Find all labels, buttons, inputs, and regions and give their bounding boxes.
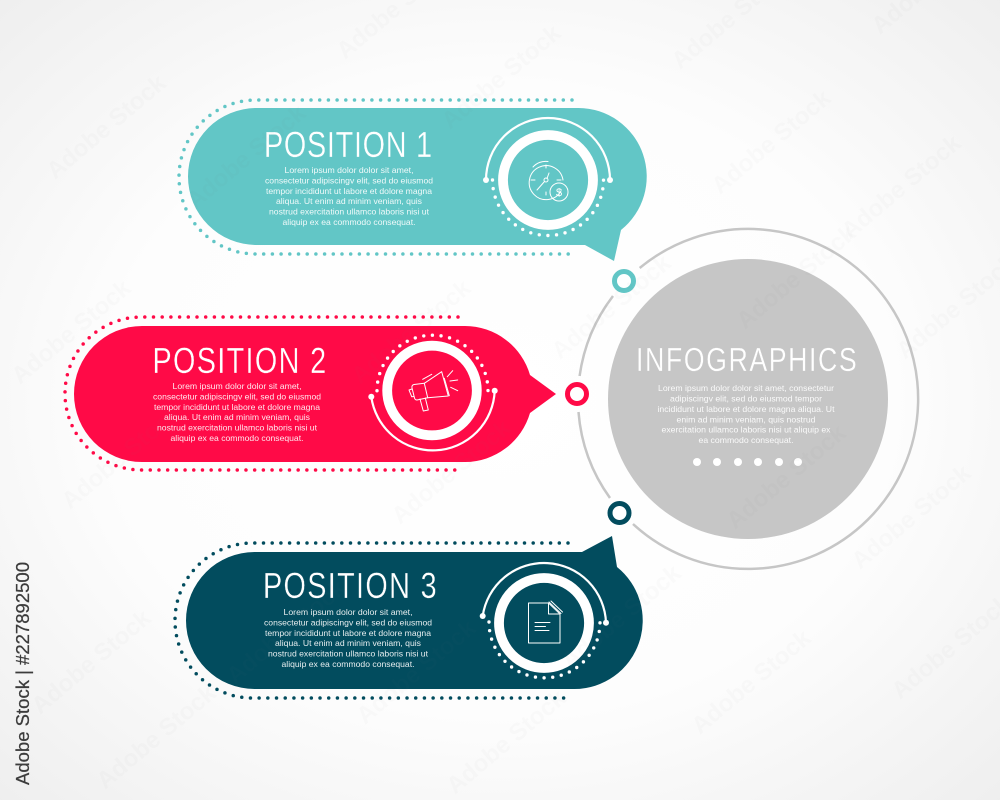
icon: clock with dollar: $ [556, 187, 562, 199]
badge ring 2 [368, 335, 498, 450]
text block: position 2 body: aliqua. Ut enim ad minim veniam, quis [164, 412, 310, 422]
text block: position 2 body: nostrud exercitation ullamco laboris nisi ut [157, 423, 318, 433]
badge ring 3 [480, 563, 609, 678]
six white dots [693, 458, 802, 466]
panel: position 2 [65, 317, 556, 470]
text block: position 1 body: aliqua. Ut enim ad minim veniam, quis [276, 196, 422, 206]
watermarks: Adobe Stock [92, 679, 222, 795]
center ring with gaps [578, 229, 918, 569]
watermarks: Adobe Stock [442, 684, 572, 800]
watermarks: Adobe Stock [352, 614, 482, 730]
icon: clock with dollar [529, 161, 568, 201]
text block: center body: exercitation ullamco laboris nisi ut aliquip ex [662, 425, 831, 435]
teal speech bubble [188, 108, 647, 261]
red speech bubble [74, 326, 556, 462]
watermarks: Adobe Stock [57, 399, 187, 515]
heading: position 2: POSITION 2 [152, 340, 326, 381]
text block: position 3 body: consectetur adipiscingv elit, sed do eiusmod [264, 617, 432, 627]
watermarks: Adobe Stock [547, 249, 677, 365]
text block: position 1 body: tempor incididunt ut labore et dolore magna [266, 186, 432, 196]
icon: megaphone [409, 371, 458, 411]
node: red connector [568, 384, 586, 404]
dotted outline 1 [179, 100, 573, 254]
text block: position 2 body: tempor incididunt ut labore et dolore magna [154, 402, 320, 412]
watermarks: Adobe Stock [42, 69, 172, 185]
watermarks: Adobe Stock [347, 274, 477, 390]
text block: center body [658, 383, 835, 445]
text block: position 1 body: aliquip ex ea commodo consequat. [282, 217, 416, 227]
watermarks: Adobe Stock [687, 624, 817, 740]
heading: position 1: POSITION 1 [264, 124, 432, 165]
heading: position 3: POSITION 3 [263, 565, 437, 606]
watermarks: Adobe Stock [7, 274, 137, 390]
watermarks: Adobe Stock [707, 84, 837, 200]
text block: position 1 body [265, 165, 433, 227]
node: dark connector [610, 504, 629, 522]
heading: infographics: INFOGRAPHICS [636, 342, 857, 379]
text block: center body: incididunt ut labore et dolore magna aliqua. Ut [658, 404, 835, 414]
text block: position 2 body: consectetur adipiscingv elit, sed do eiusmod [153, 391, 321, 401]
text block: position 3 body: tempor incididunt ut labore et dolore magna [265, 628, 431, 638]
dark speech bubble [186, 536, 643, 689]
watermarks: Adobe Stock [182, 99, 312, 215]
text block: position 1 body: Lorem ipsum dolor dolor sit amet, [284, 165, 414, 175]
badge ring 1 [483, 118, 613, 236]
watermarks: Adobe Stock [27, 604, 157, 720]
dotted outline 3 [175, 543, 571, 698]
text block: center body: ea commodo consequat. [698, 435, 794, 445]
watermarks: Adobe Stock [557, 559, 687, 675]
panel: infographics circle [608, 259, 888, 539]
watermarks: Adobe Stock [837, 129, 967, 245]
watermarks: Adobe Stock [722, 419, 852, 535]
dotted outline 2 [65, 317, 460, 470]
text block: position 2 body: Lorem ipsum dolor dolor sit amet, [172, 381, 302, 391]
node: teal connector [614, 272, 634, 290]
icon: document [528, 601, 562, 643]
text block: center body: adipiscingv elit, sed do eiusmod tempor [670, 394, 822, 404]
watermarks: Adobe Stock [437, 19, 567, 135]
watermarks: Adobe Stock [387, 414, 517, 530]
stock id vertical label: Adobe Stock | #227892500 [13, 562, 33, 785]
panel: position 1 [179, 100, 647, 261]
text block: position 3 body [264, 607, 432, 669]
text block: position 2 body: aliquip ex ea commodo consequat. [170, 433, 304, 443]
watermarks: Adobe Stock [732, 219, 862, 335]
text block: position 2 body [153, 381, 321, 443]
text block: center body: enim ad minim veniam, quis nostrud [676, 414, 816, 424]
text block: center body: Lorem ipsum dolor dolor sit amet, consectetur [658, 383, 834, 393]
text block: position 3 body: nostrud exercitation ullamco laboris nisi ut [268, 649, 429, 659]
text block: position 3 body: aliqua. Ut enim ad minim veniam, quis [275, 638, 421, 648]
text block: position 3 body: Lorem ipsum dolor dolor sit amet, [284, 607, 412, 617]
text block: position 1 body: nostrud exercitation ullamco laboris nisi ut [269, 207, 430, 217]
text block: position 3 body: aliquip ex ea commodo consequat. [282, 659, 414, 669]
text block: position 1 body: consectetur adipiscingv elit, sed do eiusmod [265, 175, 433, 185]
panel: position 3 [175, 536, 643, 698]
watermarks: Adobe Stock [847, 459, 977, 575]
watermarks: Adobe Stock [222, 574, 352, 690]
